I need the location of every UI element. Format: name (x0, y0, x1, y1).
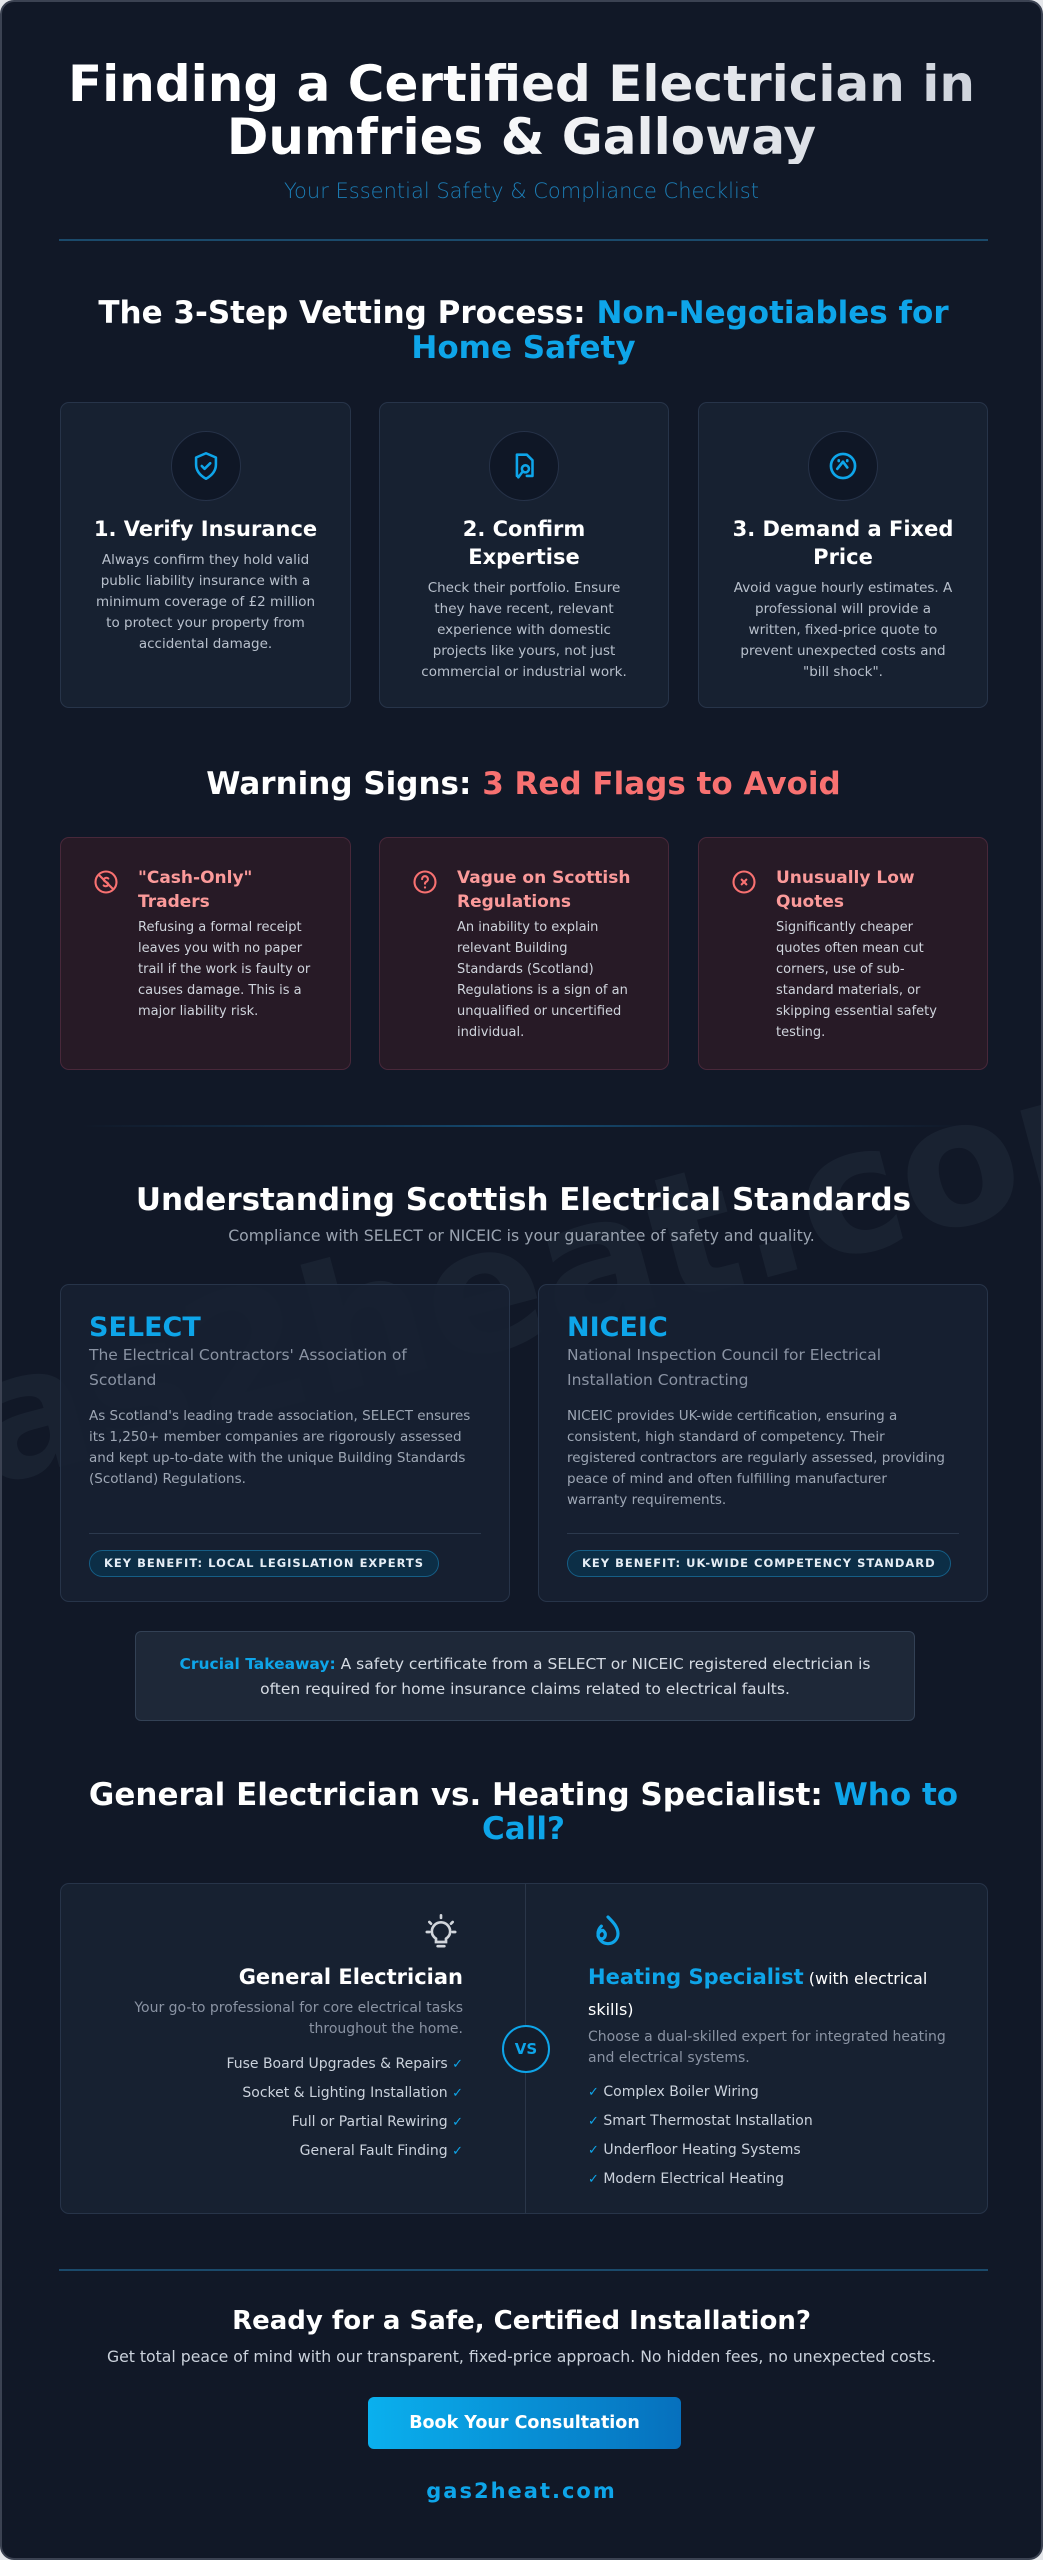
callout: crucial takeaway: often required for home insurance claims related to electrical faults. (260, 1680, 790, 1698)
text: Regulations (457, 892, 571, 912)
left: general electrician: Fuse Board Upgrades & Repairs ✓ (226, 2056, 463, 2072)
text (138, 868, 310, 1019)
heading: warning signs: Warning Signs: 3 Red Flags to Avoid (206, 766, 841, 802)
icon: shield (170, 431, 240, 501)
red card: cash only (60, 837, 351, 1070)
text: written, fixed-price quote to (749, 622, 937, 638)
text: corners, use of sub- (776, 962, 905, 977)
text: Price (813, 545, 873, 569)
right: heating specialist: skills) (588, 2000, 634, 2019)
icon: flame (596, 1915, 620, 1946)
card: SELECT: SELECT (89, 1312, 201, 1343)
text: trail if the work is faulty or (138, 962, 310, 977)
text: Always confirm they hold valid public liability insurance with a minimum coverage of £2 million to protect your property from accidental damage. (96, 552, 315, 652)
right: heating specialist: Choose a dual-skilled expert for integrated heating (588, 2029, 946, 2045)
right: heating specialist: and electrical systems. (588, 2050, 750, 2066)
text (457, 868, 630, 1040)
text: unqualified or uncertified (457, 1004, 621, 1019)
icon: question (413, 870, 437, 894)
text: Standards (Scotland) (457, 962, 594, 977)
icon: document search (489, 431, 559, 501)
left: general electrician: throughout the home. (309, 2021, 463, 2037)
right: heating specialist (588, 1915, 946, 2187)
right: heating specialist: Heating Specialist (with electrical (588, 1965, 927, 1989)
text: Regulations is a sign of an (457, 983, 628, 998)
left: general electrician: Socket & Lighting Installation ✓ (242, 2085, 463, 2101)
card: fixed price (698, 402, 988, 708)
text: Expertise (468, 545, 580, 569)
text: major liability risk. (138, 1004, 258, 1019)
text: testing. (776, 1025, 825, 1040)
left: general electrician: Your go-to professional for core electrical tasks (134, 2000, 463, 2016)
text: professional will provide a (755, 601, 931, 617)
icon: gauge (808, 431, 878, 501)
left: general electrician: Full or Partial Rewiring ✓ (292, 2114, 463, 2130)
card: SELECT: (Scotland) Regulations. (89, 1471, 246, 1487)
text: Avoid vague hourly estimates. A (734, 580, 952, 596)
text (733, 517, 953, 680)
red card: vague regulations (379, 837, 669, 1070)
right: heating specialist: ✓ Smart Thermostat Installation (588, 2113, 813, 2129)
callout: crucial takeaway (135, 1631, 915, 1721)
heading: standards: Understanding Scottish Electrical Standards (136, 1182, 911, 1218)
left: general electrician: General Electrician (239, 1965, 463, 1989)
text: An inability to explain (457, 920, 598, 935)
text: Significantly cheaper (776, 920, 913, 935)
heading: who to call: General Electrician vs. Heating Specialist: Who to (89, 1777, 958, 1813)
vs badge: VS (515, 2040, 537, 2058)
right: heating specialist: ✓ Underfloor Heating Systems (588, 2142, 801, 2158)
heading: vetting process: Home Safety (411, 330, 636, 366)
text (776, 868, 937, 1040)
button (368, 2397, 681, 2449)
text: Traders (138, 892, 210, 912)
comparison panel (60, 1883, 988, 2214)
icon: no cash (94, 870, 118, 894)
cta heading: Ready for a Safe, Certified Installation? (232, 2306, 811, 2336)
card: verify insurance (60, 402, 351, 708)
callout: crucial takeaway: Crucial Takeaway: A safety certificate from a SELECT or NICEIC registered electrician is (179, 1655, 870, 1673)
text: quotes often mean cut (776, 941, 924, 956)
card: SELECT: As Scotland's leading trade association, SELECT ensures (89, 1408, 470, 1424)
card: confirm expertise (379, 402, 669, 708)
heading: who to call (89, 1777, 958, 1847)
left: general electrician (134, 1914, 463, 2159)
text: commercial or industrial work. (421, 664, 627, 680)
text: 2. Confirm (463, 517, 585, 541)
text: "bill shock". (803, 664, 883, 680)
card: NICEIC: Installation Contracting (567, 1371, 748, 1389)
text (421, 517, 627, 680)
text: Check their portfolio. Ensure (428, 580, 620, 596)
text: experience with domestic (437, 622, 611, 638)
subtitle: Your Essential Safety & Compliance Checklist (284, 179, 759, 203)
heading: vetting process: The 3-Step Vetting Process: Non-Negotiables for (98, 295, 949, 331)
footer url: gas2heat.com (426, 2479, 617, 2503)
card: SELECT (60, 1284, 510, 1602)
text: prevent unexpected costs and (740, 643, 946, 659)
text: 1. Verify Insurance (94, 517, 317, 541)
card: SELECT: The Electrical Contractors' Association of (89, 1346, 407, 1364)
card: SELECT: and kept up-to-date with the unique Building Standards (89, 1450, 465, 1466)
text: leaves you with no paper (138, 941, 302, 956)
card: NICEIC: NICEIC (567, 1312, 668, 1343)
text: projects like yours, not just (433, 643, 615, 659)
text: they have recent, relevant (434, 601, 614, 617)
text: individual. (457, 1025, 524, 1040)
right: heating specialist: ✓ Modern Electrical Heating (588, 2171, 784, 2187)
card: NICEIC (538, 1284, 988, 1602)
card: NICEIC: National Inspection Council for Electrical (567, 1346, 881, 1364)
text: skipping essential safety (776, 1004, 937, 1019)
badge: KEY BENEFIT: UK-WIDE COMPETENCY STANDARD (582, 1556, 936, 1570)
cta text: Get total peace of mind with our transparent, fixed-price approach. No hidden fees, no unexpected costs. (107, 2347, 936, 2366)
text: "Cash-Only" (138, 868, 252, 888)
text: Unusually Low (776, 868, 915, 888)
right: heating specialist: ✓ Complex Boiler Wiring (588, 2084, 759, 2100)
text: relevant Building (457, 941, 568, 956)
card: NICEIC: registered contractors are regularly assessed, providing (567, 1450, 945, 1466)
card: NICEIC: peace of mind and often fulfilling manufacturer (567, 1471, 887, 1487)
icon: bulb (426, 1914, 456, 1948)
badge: KEY BENEFIT: LOCAL LEGISLATION EXPERTS (104, 1556, 424, 1570)
title: Finding a Certified Electrician in (68, 55, 975, 113)
icon: x circle (732, 870, 756, 894)
standards subtitle: Compliance with SELECT or NICEIC is your guarantee of safety and quality. (228, 1226, 815, 1245)
title: Dumfries & Galloway (227, 108, 816, 166)
text: Vague on Scottish (457, 868, 630, 888)
card: NICEIC: consistent, high standard of competency. Their (567, 1429, 885, 1445)
card: NICEIC: NICEIC provides UK-wide certification, ensuring a (567, 1408, 897, 1424)
text: Quotes (776, 892, 844, 912)
heading: who to call: Call? (482, 1811, 565, 1847)
badge (89, 1550, 439, 1577)
left: general electrician: General Fault Finding ✓ (300, 2143, 463, 2159)
card: NICEIC: warranty requirements. (567, 1492, 726, 1508)
card: SELECT: its 1,250+ member companies are rigorously assessed (89, 1429, 462, 1445)
text: standard materials, or (776, 983, 920, 998)
red card: low quotes (698, 837, 988, 1070)
text: Refusing a formal receipt (138, 920, 302, 935)
heading: vetting process (98, 295, 949, 366)
button: Book Your Consultation (409, 2413, 640, 2433)
text: 3. Demand a Fixed (733, 517, 953, 541)
text: causes damage. This is a (138, 983, 302, 998)
card: SELECT: Scotland (89, 1371, 156, 1389)
vs badge (502, 2025, 550, 2073)
title (2, 58, 1041, 164)
badge (567, 1550, 951, 1577)
